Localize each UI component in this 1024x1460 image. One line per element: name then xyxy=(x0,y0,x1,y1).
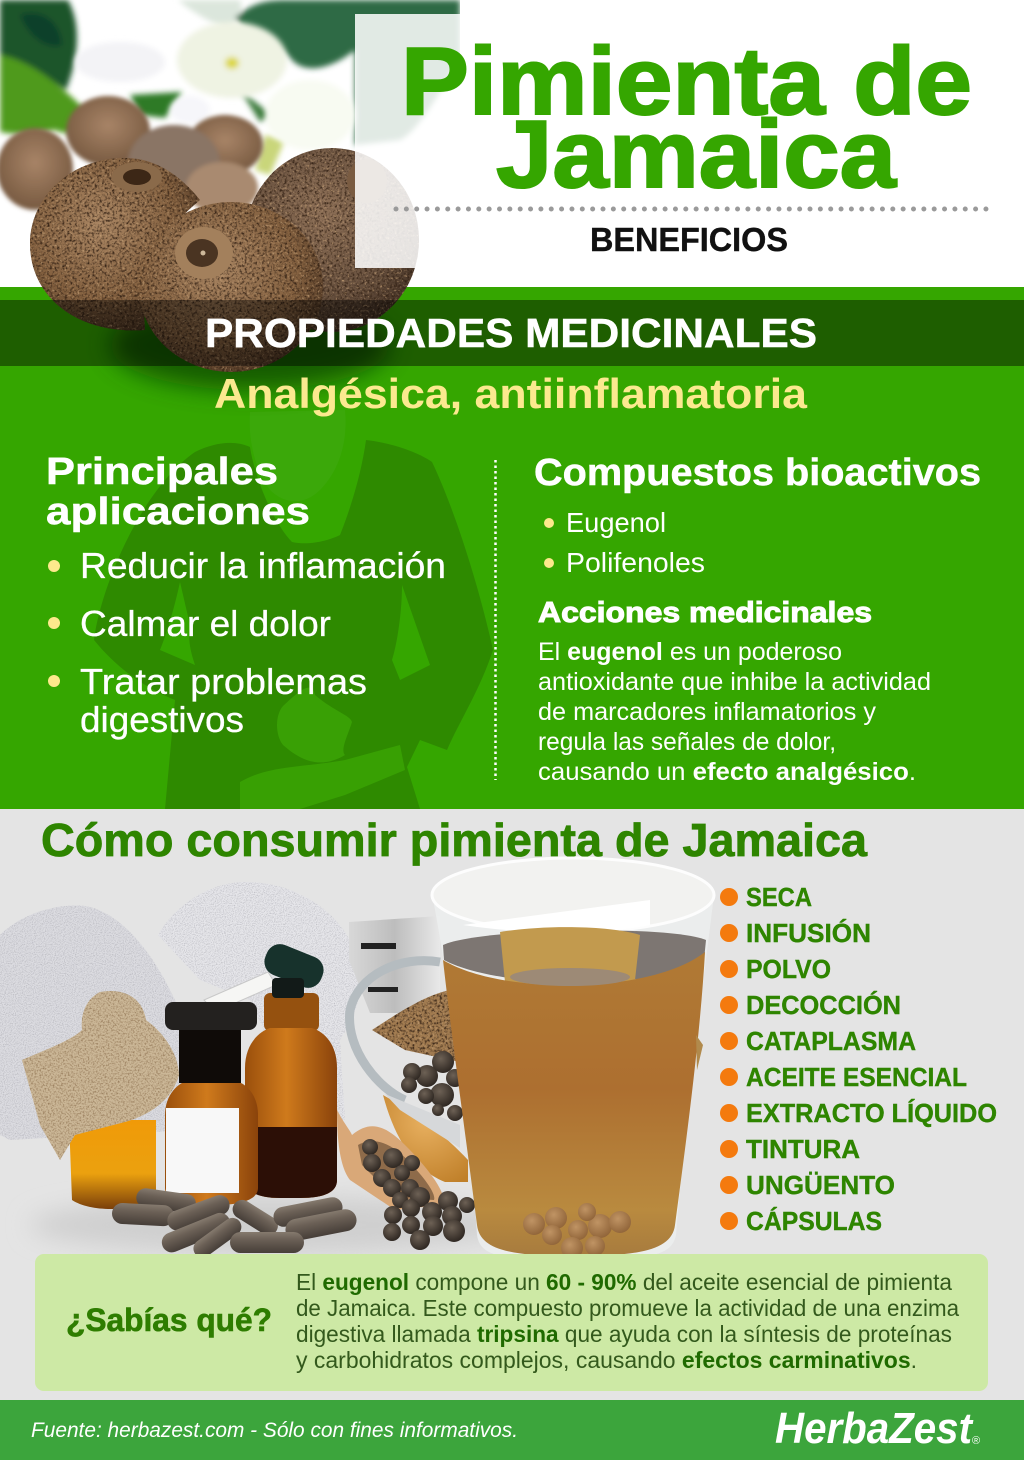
form labels: DECOCCIÓN xyxy=(746,990,901,1020)
heading: how to consume: Cómo consumir pimienta de Jamaica xyxy=(41,814,867,866)
application list: Calmar el dolor xyxy=(80,603,331,644)
title: Pimienta de xyxy=(401,28,972,135)
icon: metal spoon handle xyxy=(349,916,440,1013)
compound list: Eugenol xyxy=(566,507,666,538)
application list: Reducir la inflamación xyxy=(80,545,446,586)
callout text: El eugenol compone un 60 - 90% del aceite esencial de pimienta xyxy=(296,1269,953,1295)
medicinal actions paragraph: regula las señales de dolor, xyxy=(538,728,836,756)
heading: medicinal actions: Acciones medicinales xyxy=(538,597,872,629)
form labels: CATAPLASMA xyxy=(746,1026,916,1056)
consumption forms list xyxy=(720,882,997,1236)
dark band: heading background xyxy=(0,300,1024,366)
callout text: de Jamaica. Este compuesto promueve la actividad de una enzima xyxy=(296,1295,960,1321)
panel: main applications xyxy=(46,451,446,740)
callout heading: ¿Sabías qué? xyxy=(66,1302,272,1338)
photo: preparations of allspice xyxy=(0,858,714,1261)
icon: glass mug handle xyxy=(350,961,440,1100)
form labels xyxy=(746,882,997,1236)
logo: HerbaZest: HerbaZest xyxy=(775,1404,974,1453)
icon: scoop inner xyxy=(358,1141,434,1200)
form labels: ACEITE ESENCIAL xyxy=(746,1062,967,1092)
dotted divider xyxy=(396,206,988,212)
form labels: CÁPSULAS xyxy=(746,1206,882,1236)
icon: amber dropper bottle xyxy=(204,940,337,1198)
application list xyxy=(80,545,446,740)
compound list xyxy=(566,507,705,578)
medicinal actions paragraph xyxy=(538,638,931,786)
icon: metal spoon edge xyxy=(385,1094,460,1148)
icon: scoop and pile of peppercorns xyxy=(362,1139,475,1250)
icon: wooden bowl xyxy=(383,1095,468,1182)
section heading: medicinal properties: PROPIEDADES MEDICINALES xyxy=(205,310,817,356)
callout text: digestiva llamada tripsina que ayuda con la síntesis de proteínas xyxy=(296,1321,952,1347)
logo registered mark: ® xyxy=(972,1435,980,1447)
panel: bioactive compounds xyxy=(534,452,981,786)
title panel veil xyxy=(355,14,1024,268)
icon: capsules xyxy=(111,1187,358,1261)
footer xyxy=(0,1400,1024,1460)
icon: small jar with burlap xyxy=(22,991,179,1209)
form labels: TINTURA xyxy=(746,1134,860,1164)
application bullets xyxy=(48,560,60,687)
top photo: leaves and flowers xyxy=(0,0,1024,287)
medicinal actions paragraph: causando un efecto analgésico . xyxy=(538,758,916,786)
heading: bioactive compounds: Compuestos bioactivos xyxy=(534,452,981,494)
title xyxy=(401,28,972,208)
form labels: INFUSIÓN xyxy=(746,918,871,948)
title: Jamaica xyxy=(496,101,897,208)
icon: peppercorns in the glass xyxy=(523,1203,631,1259)
heading: main applications: aplicaciones xyxy=(46,491,310,533)
subtitle: BENEFICIOS xyxy=(590,221,788,258)
peppercorns photo xyxy=(0,96,419,372)
properties subtitle: Analgésica, antiinflamatoria xyxy=(214,370,808,417)
medicinal actions paragraph: de marcadores inflamatorios y xyxy=(538,698,876,726)
icon: bowl peppercorns xyxy=(401,1051,464,1121)
woman silhouette holding stomach xyxy=(94,410,493,809)
application list: digestivos xyxy=(80,699,244,740)
callout text xyxy=(296,1269,960,1373)
callout text: y carbohidratos complejos, causando efectos carminativos. xyxy=(296,1347,917,1373)
icon: amber bottle with label xyxy=(165,1002,258,1205)
orange bullets xyxy=(720,888,738,1230)
callout: did you know xyxy=(35,1254,988,1391)
heading: main applications: Principales xyxy=(46,451,278,493)
heading: main applications xyxy=(46,451,310,533)
green background band xyxy=(0,287,1024,809)
medicinal actions paragraph: antioxidante que inhibe la actividad xyxy=(538,668,931,696)
icon: ground allspice powder xyxy=(372,990,460,1062)
form labels: SECA xyxy=(746,882,812,912)
panel: how to consume background xyxy=(0,809,1024,1400)
application list: Tratar problemas xyxy=(80,661,367,702)
compound list: Polifenoles xyxy=(566,547,705,578)
form labels: UNGÜENTO xyxy=(746,1170,895,1200)
shadow below peppercorns xyxy=(110,300,390,390)
form labels: POLVO xyxy=(746,954,831,984)
form labels: EXTRACTO LÍQUIDO xyxy=(746,1098,997,1128)
compound bullets xyxy=(544,518,554,568)
icon: cloth poultice bags xyxy=(0,882,360,1140)
icon: wooden scoop xyxy=(337,1110,444,1210)
source note: Fuente: herbazest.com - Sólo con fines informativos. xyxy=(31,1419,518,1442)
medicinal actions paragraph: El eugenol es un poderoso xyxy=(538,638,842,666)
icon: glass of tea xyxy=(432,858,714,1260)
shadow below objects xyxy=(30,1197,510,1253)
